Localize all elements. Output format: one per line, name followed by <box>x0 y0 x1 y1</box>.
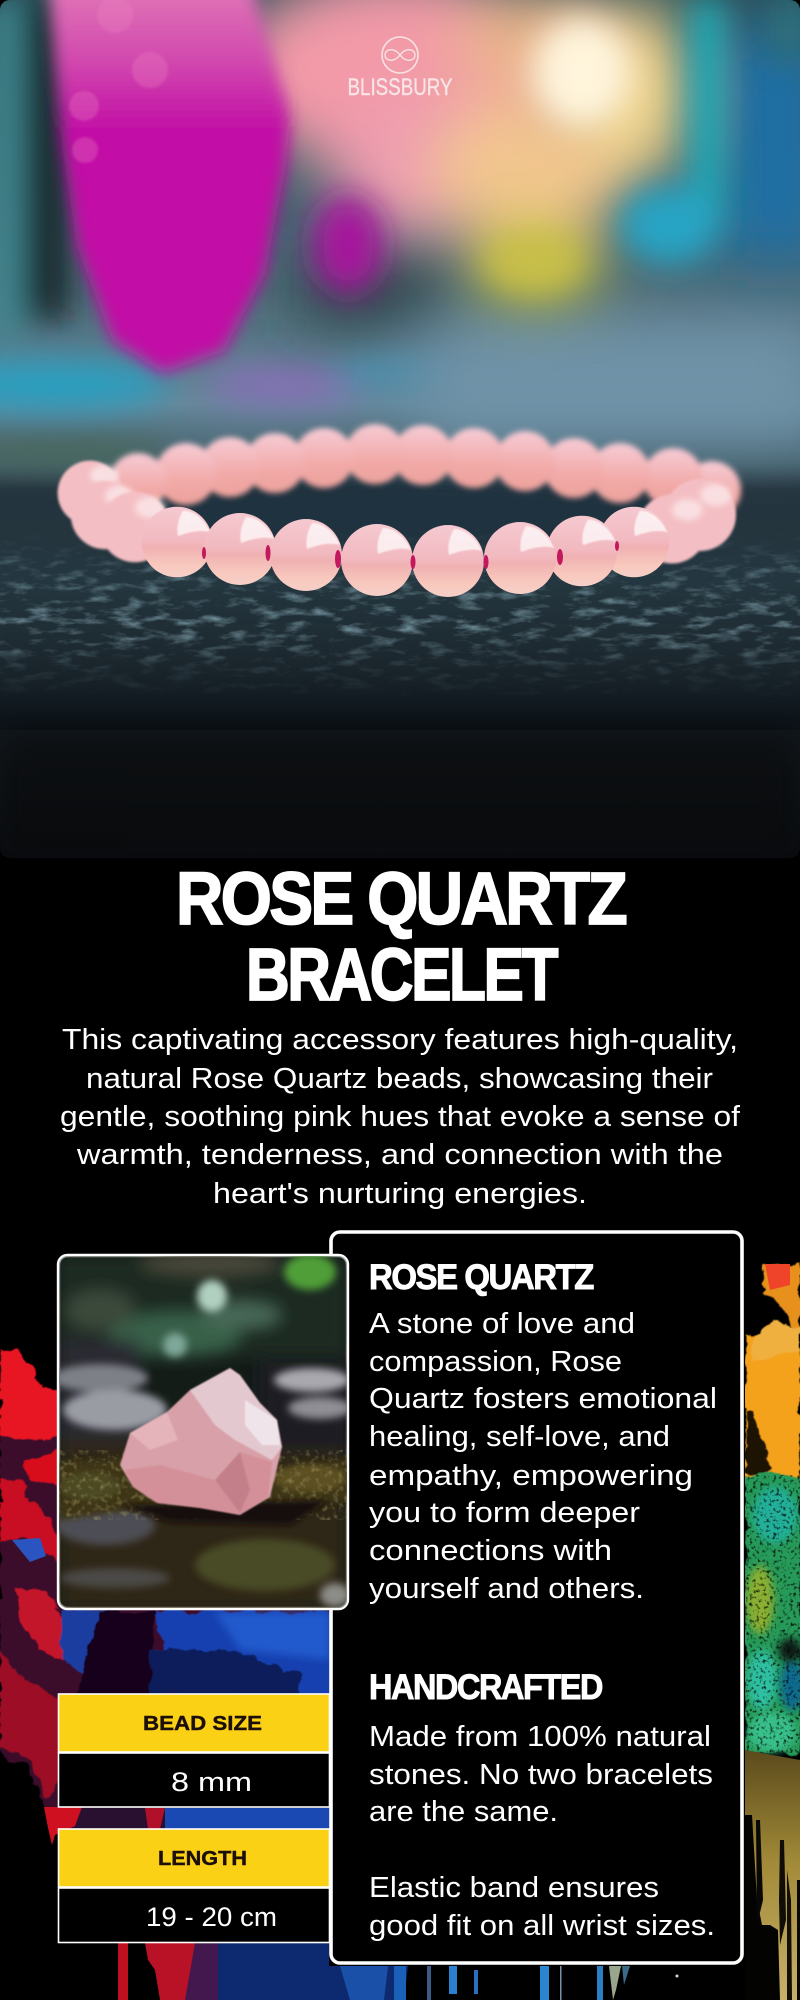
rose quartz description: yourself and others. <box>369 1573 644 1605</box>
spec table: bead size: 8 mm <box>171 1767 252 1797</box>
handcrafted description: good fit on all wrist sizes. <box>369 1910 715 1942</box>
rose quartz description: connections with <box>369 1535 612 1567</box>
paint splash: left red and blue <box>0 1348 678 2000</box>
rose quartz description: compassion, Rose <box>369 1346 622 1378</box>
bracelet: side beads <box>58 461 736 564</box>
rose quartz description: Quartz fosters emotional <box>369 1383 717 1415</box>
bokeh dots <box>69 0 168 163</box>
pink and peach bokeh <box>230 0 800 302</box>
handcrafted description <box>369 1721 715 1942</box>
rose quartz description: empathy, empowering <box>369 1460 693 1492</box>
brand logo <box>348 37 452 101</box>
paint between the spec tables <box>44 1807 330 1845</box>
spec table: bead size: BEAD SIZE <box>143 1713 262 1735</box>
raw rose quartz crystal <box>120 1368 282 1515</box>
title: BRACELET <box>246 933 558 1016</box>
spec table: length: 19 - 20 cm <box>146 1902 277 1932</box>
stone surface texture <box>0 544 800 690</box>
heading: handcrafted: HANDCRAFTED <box>369 1668 602 1707</box>
spec table: length <box>58 1829 330 1942</box>
handcrafted description: stones. No two bracelets <box>369 1759 713 1791</box>
intro paragraph <box>60 1024 741 1210</box>
intro paragraph: natural Rose Quartz beads, showcasing their <box>86 1063 713 1095</box>
handcrafted description: Elastic band ensures <box>369 1872 659 1904</box>
intro paragraph: This captivating accessory features high-quality, <box>62 1024 738 1056</box>
intro paragraph: heart's nurturing energies. <box>213 1178 587 1210</box>
stone photo card: raw rose quartz <box>52 1250 352 1610</box>
paint drips below the spec tables <box>118 1943 678 2000</box>
moss band <box>59 1450 347 1525</box>
title: ROSE QUARTZ <box>176 857 627 940</box>
paint splash: right orange, green and yellow drips <box>745 1264 800 2000</box>
bracelet: far row of beads <box>109 424 741 519</box>
heading: rose quartz: ROSE QUARTZ <box>369 1258 594 1297</box>
brand logo: BLISSBURY <box>348 74 452 101</box>
rose quartz description: you to form deeper <box>369 1497 640 1529</box>
handcrafted description: Made from 100% natural <box>369 1721 711 1753</box>
text panel: rose quartz and handcrafted <box>331 1232 742 1963</box>
rose quartz description: healing, self-love, and <box>369 1421 670 1453</box>
warm glow <box>532 17 632 127</box>
magenta blob <box>48 0 290 373</box>
title <box>176 857 627 1016</box>
spec table: length: LENGTH <box>158 1848 247 1870</box>
spec table: bead size <box>58 1694 330 1807</box>
intro paragraph: gentle, soothing pink hues that evoke a sense of <box>60 1101 741 1133</box>
rose quartz description <box>369 1308 717 1605</box>
bracelet: front beads <box>142 507 669 597</box>
rose quartz description: A stone of love and <box>369 1308 635 1340</box>
handcrafted description: are the same. <box>369 1796 558 1828</box>
hero photo: rose quartz bracelet on stone with blurred colourful backdrop <box>0 0 800 858</box>
intro paragraph: warmth, tenderness, and connection with the <box>76 1139 723 1171</box>
